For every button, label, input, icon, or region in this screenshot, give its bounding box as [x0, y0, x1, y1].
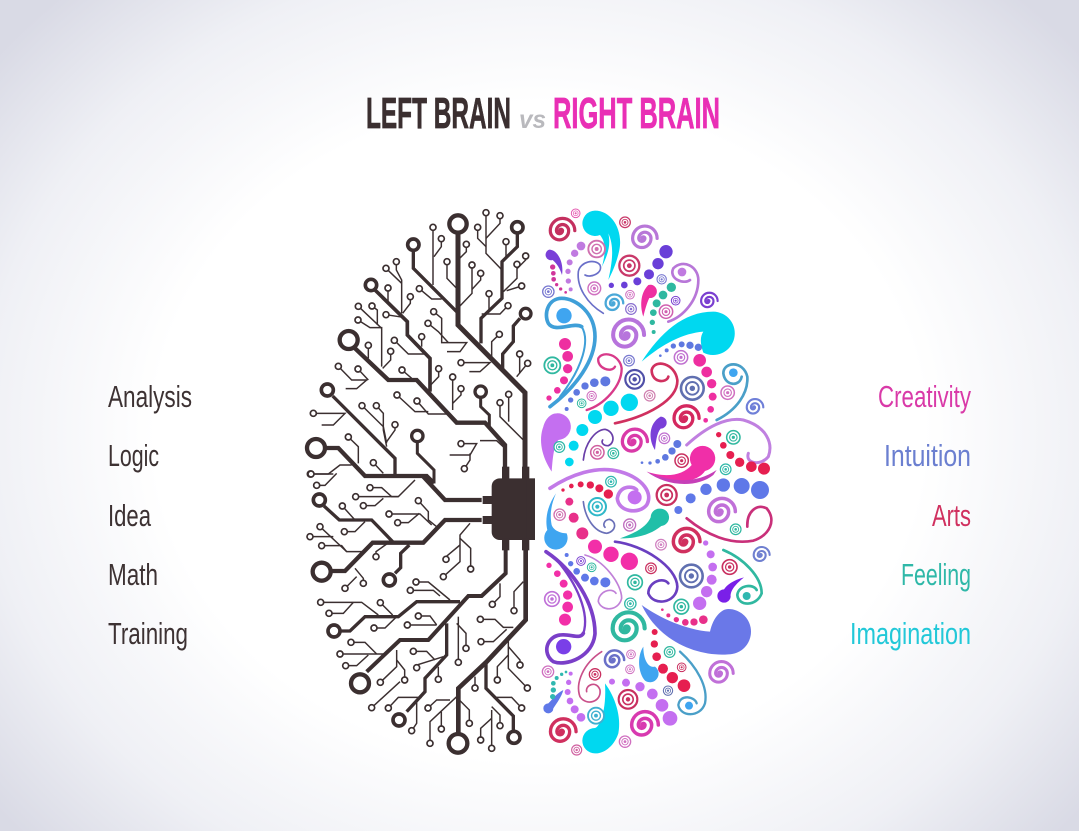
label: Imagination: Imagination — [850, 616, 971, 651]
concentric rings — [543, 209, 740, 475]
left hemisphere: circuit board — [307, 213, 535, 753]
central chip — [483, 467, 535, 550]
filled commas — [541, 211, 735, 484]
label: Logic: Logic — [108, 438, 159, 473]
swirls: upper half — [541, 209, 770, 484]
spirals — [550, 498, 770, 741]
right hemisphere: colorful swirls — [541, 209, 771, 755]
label: Idea: Idea — [108, 498, 152, 533]
circuit: upper half — [307, 213, 531, 483]
circuit: lower half — [310, 467, 535, 753]
filled commas — [543, 493, 751, 753]
hooked swirl lines — [546, 262, 770, 463]
title — [366, 89, 720, 138]
dots — [546, 242, 770, 475]
title: right brain: RIGHT BRAIN — [553, 89, 720, 138]
label: Feeling: Feeling — [901, 557, 971, 592]
label: Training: Training — [108, 616, 188, 651]
title: vs: vs — [519, 106, 546, 134]
left labels list — [108, 379, 192, 651]
title: left brain: LEFT BRAIN — [366, 89, 511, 138]
label: Creativity: Creativity — [878, 379, 971, 414]
dots — [546, 478, 769, 726]
label: Intuition: Intuition — [884, 438, 971, 473]
concentric rings — [542, 476, 741, 755]
spirals — [550, 218, 763, 451]
hooked swirl lines — [546, 470, 771, 714]
right labels list — [850, 379, 971, 651]
label: Analysis: Analysis — [108, 379, 192, 414]
swirls: lower half — [542, 470, 771, 755]
label: Arts: Arts — [932, 498, 971, 533]
label: Math: Math — [108, 557, 158, 592]
